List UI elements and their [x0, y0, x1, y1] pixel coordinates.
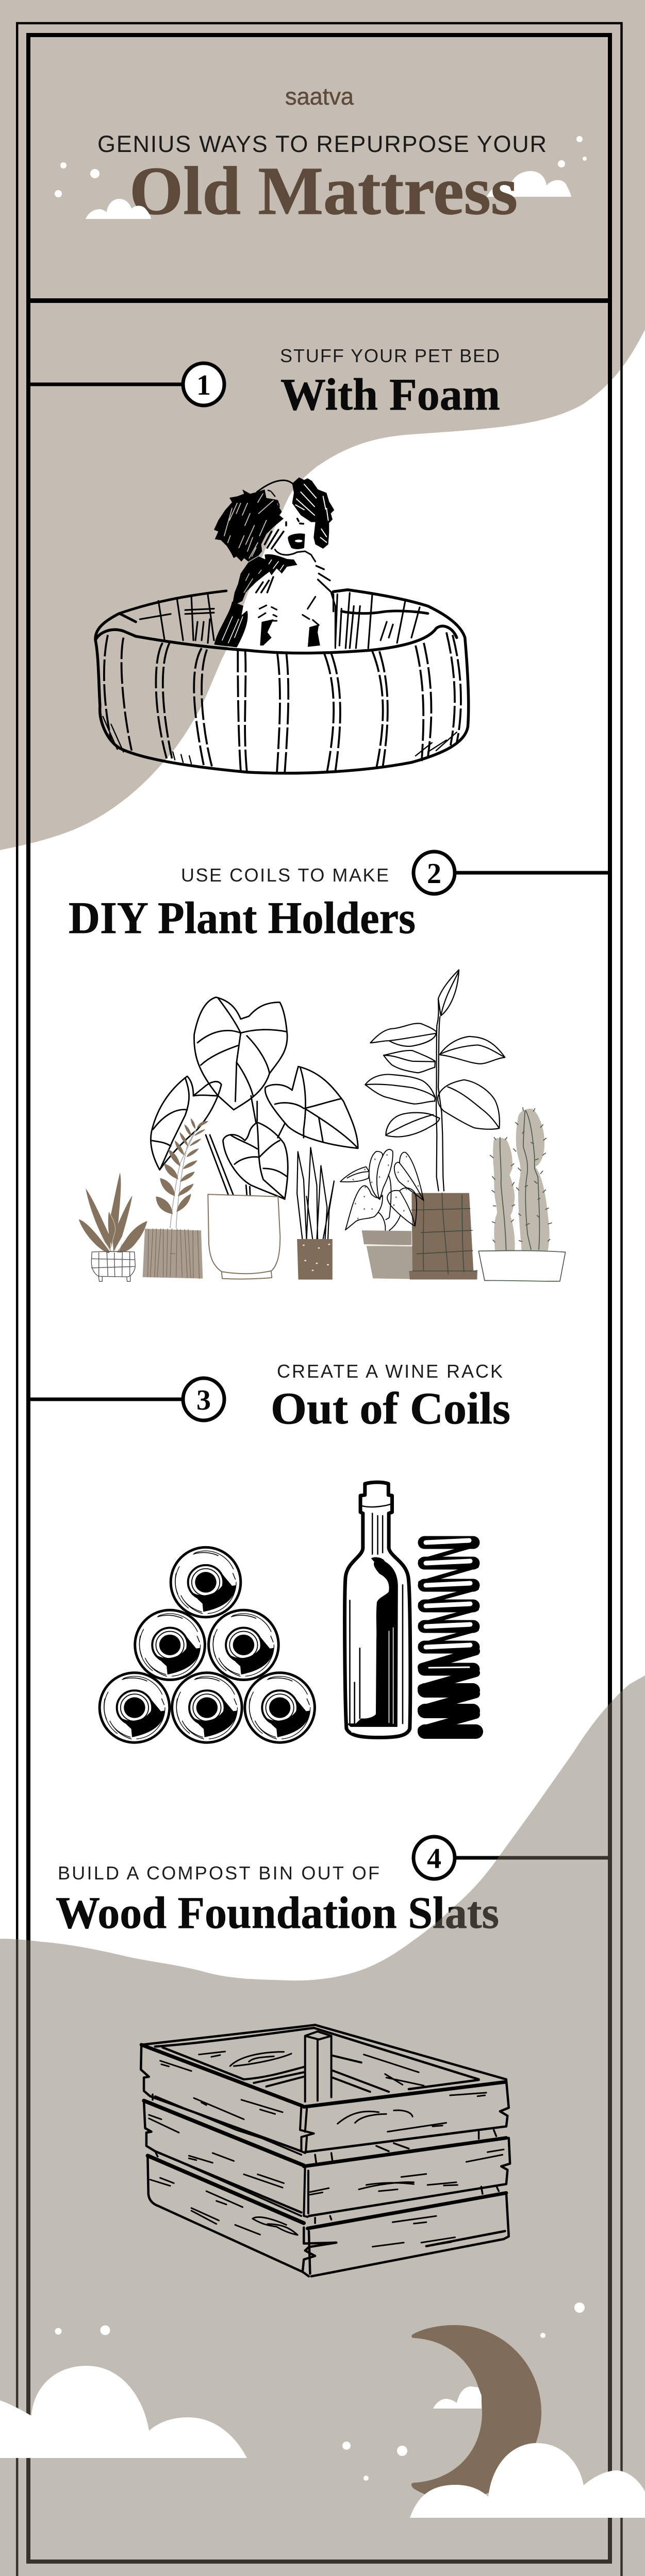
crate top rim — [141, 2025, 506, 2089]
dog neck shadow — [232, 556, 272, 606]
coil spring — [420, 1540, 477, 1732]
section 1 — [30, 345, 500, 420]
begonia dots — [353, 1154, 419, 1219]
dog left leg — [215, 602, 247, 647]
number badge 1: 1 — [196, 369, 211, 401]
illustration: wooden crate — [141, 2025, 510, 2276]
dog head top line — [257, 480, 293, 492]
section 1 kicker: STUFF YOUR PET BED — [280, 345, 500, 366]
connector line 1 — [30, 382, 181, 386]
header: dots behind text — [55, 136, 587, 197]
section 2 — [69, 852, 608, 943]
bottle end middle right — [209, 1610, 278, 1680]
bottle end bottom left — [100, 1673, 170, 1742]
illustration: stacked bottles, wine bottle, coil — [100, 1482, 477, 1742]
plants: alocasia and snake plant — [151, 997, 358, 1280]
connector line 3 — [30, 1397, 181, 1401]
number badge 2: 2 — [427, 858, 441, 890]
cactus spines — [490, 1108, 552, 1251]
crate wood grain — [149, 2052, 504, 2247]
crate inner slats — [244, 2056, 389, 2092]
bed back stitching and hatching — [140, 593, 420, 648]
wine bottle capsule details — [360, 1504, 392, 1554]
zz plant stem — [170, 1130, 196, 1228]
coil highlights — [426, 1540, 470, 1647]
section 1 heading: With Foam — [280, 370, 500, 420]
section 4 text — [56, 1837, 608, 1938]
wine bottle outline — [345, 1482, 410, 1737]
dog chest marks — [259, 597, 319, 625]
dog head and chest — [214, 478, 334, 625]
white pot — [208, 1194, 280, 1279]
bottle end bottom center — [172, 1673, 242, 1742]
brand logo: saatva — [285, 83, 354, 110]
begonia pot — [362, 1230, 411, 1245]
dog face hatching — [264, 519, 303, 549]
crate corner layer two — [304, 2165, 308, 2217]
crate right face layer one — [305, 2080, 509, 2152]
rubber plant stem — [436, 998, 444, 1191]
bottle end top — [171, 1547, 241, 1617]
aloe veins — [102, 1212, 122, 1252]
crate front corner layer one — [300, 2106, 314, 2153]
brown grid pot — [409, 1193, 477, 1279]
wine bottle shadow — [346, 1557, 403, 1734]
dog chin fur — [264, 554, 297, 575]
plants: rubber plant, begonia and cacti — [340, 970, 566, 1281]
illustration: dog in bed — [95, 478, 469, 773]
aloe pot — [91, 1251, 135, 1281]
number badge 2 — [414, 852, 455, 894]
plant stems — [206, 1096, 285, 1195]
icon: header right cloud — [487, 171, 571, 197]
background: top beige wave — [0, 0, 645, 850]
crate corner layer three — [303, 2228, 336, 2276]
bed outer — [95, 590, 469, 773]
cactus planter — [478, 1250, 566, 1281]
zz plant pot — [143, 1229, 203, 1279]
icon: bottom left cloud — [0, 2366, 247, 2458]
section 2 heading: DIY Plant Holders — [69, 893, 416, 943]
number badge 1 — [183, 363, 224, 405]
coil diagonal bands — [420, 1545, 477, 1645]
bed front rim — [95, 626, 457, 653]
bed front stitching — [104, 632, 461, 773]
section 3 kicker: CREATE A WINE RACK — [277, 1361, 503, 1382]
section 3 heading: Out of Coils — [271, 1384, 510, 1434]
title line two: Old Mattress — [129, 152, 518, 229]
dog left ear hatching — [224, 494, 273, 558]
coil turns — [424, 1543, 473, 1669]
illustration: potted plants — [79, 970, 566, 1281]
dog right ear hatching — [295, 484, 328, 543]
dog leg marks — [260, 619, 320, 647]
bottle end bottom right — [245, 1673, 315, 1742]
title line one: GENIUS WAYS TO REPURPOSE YOUR — [97, 131, 547, 157]
bed back rim — [119, 591, 428, 622]
dog right side — [331, 593, 335, 648]
crate right face layer two — [309, 2138, 510, 2216]
cactus bodies — [493, 1109, 550, 1251]
number badge 3 — [183, 1378, 224, 1420]
icon: header left cloud — [86, 199, 151, 219]
icon: bottom dots — [55, 2302, 585, 2481]
aloe leaves — [79, 1173, 147, 1253]
crate left face layer three — [147, 2156, 303, 2272]
bottle end middle left — [135, 1610, 205, 1680]
plant: snake plant — [297, 1147, 334, 1240]
crate right face layer three — [311, 2193, 509, 2276]
plant: alocasia leaves — [151, 997, 358, 1199]
crate gap details one — [153, 2094, 497, 2164]
section 4 heading: Wood Foundation Slats — [56, 1888, 499, 1938]
dog chest strokes — [256, 566, 334, 612]
begonia leaves — [340, 1149, 424, 1230]
bottle reflections — [389, 1628, 393, 1723]
icon: moon — [411, 2325, 541, 2500]
icon: small cloud — [433, 2386, 482, 2409]
rubber plant leaves — [365, 970, 505, 1137]
connector line 2 — [456, 871, 608, 875]
dog nose — [288, 533, 305, 549]
dog mouth — [275, 550, 316, 562]
snake plant pot — [297, 1239, 333, 1280]
section 2 kicker: USE COILS TO MAKE — [181, 865, 389, 886]
number badge 4: 4 — [427, 1843, 441, 1875]
dog right ear — [292, 478, 334, 549]
section 3 — [30, 1361, 510, 1434]
crate gap details two — [155, 2151, 499, 2223]
background: bottom beige wave — [0, 1675, 645, 2576]
number badge 3: 3 — [196, 1384, 211, 1416]
dog forehead marks — [268, 490, 279, 506]
crate left face layer one — [141, 2045, 301, 2151]
crate left face layer two — [144, 2100, 301, 2212]
plants: aloe, zz and white pot — [79, 1118, 280, 1281]
number badge 4 — [414, 1837, 455, 1879]
zz plant leaves — [156, 1118, 208, 1214]
section 4 kicker: BUILD A COMPOST BIN OUT OF — [58, 1862, 379, 1884]
icon: bottom right cloud — [410, 2443, 645, 2518]
dog left ear — [214, 489, 284, 562]
connector line 4 — [456, 1856, 608, 1860]
crate inner post — [305, 2031, 332, 2102]
